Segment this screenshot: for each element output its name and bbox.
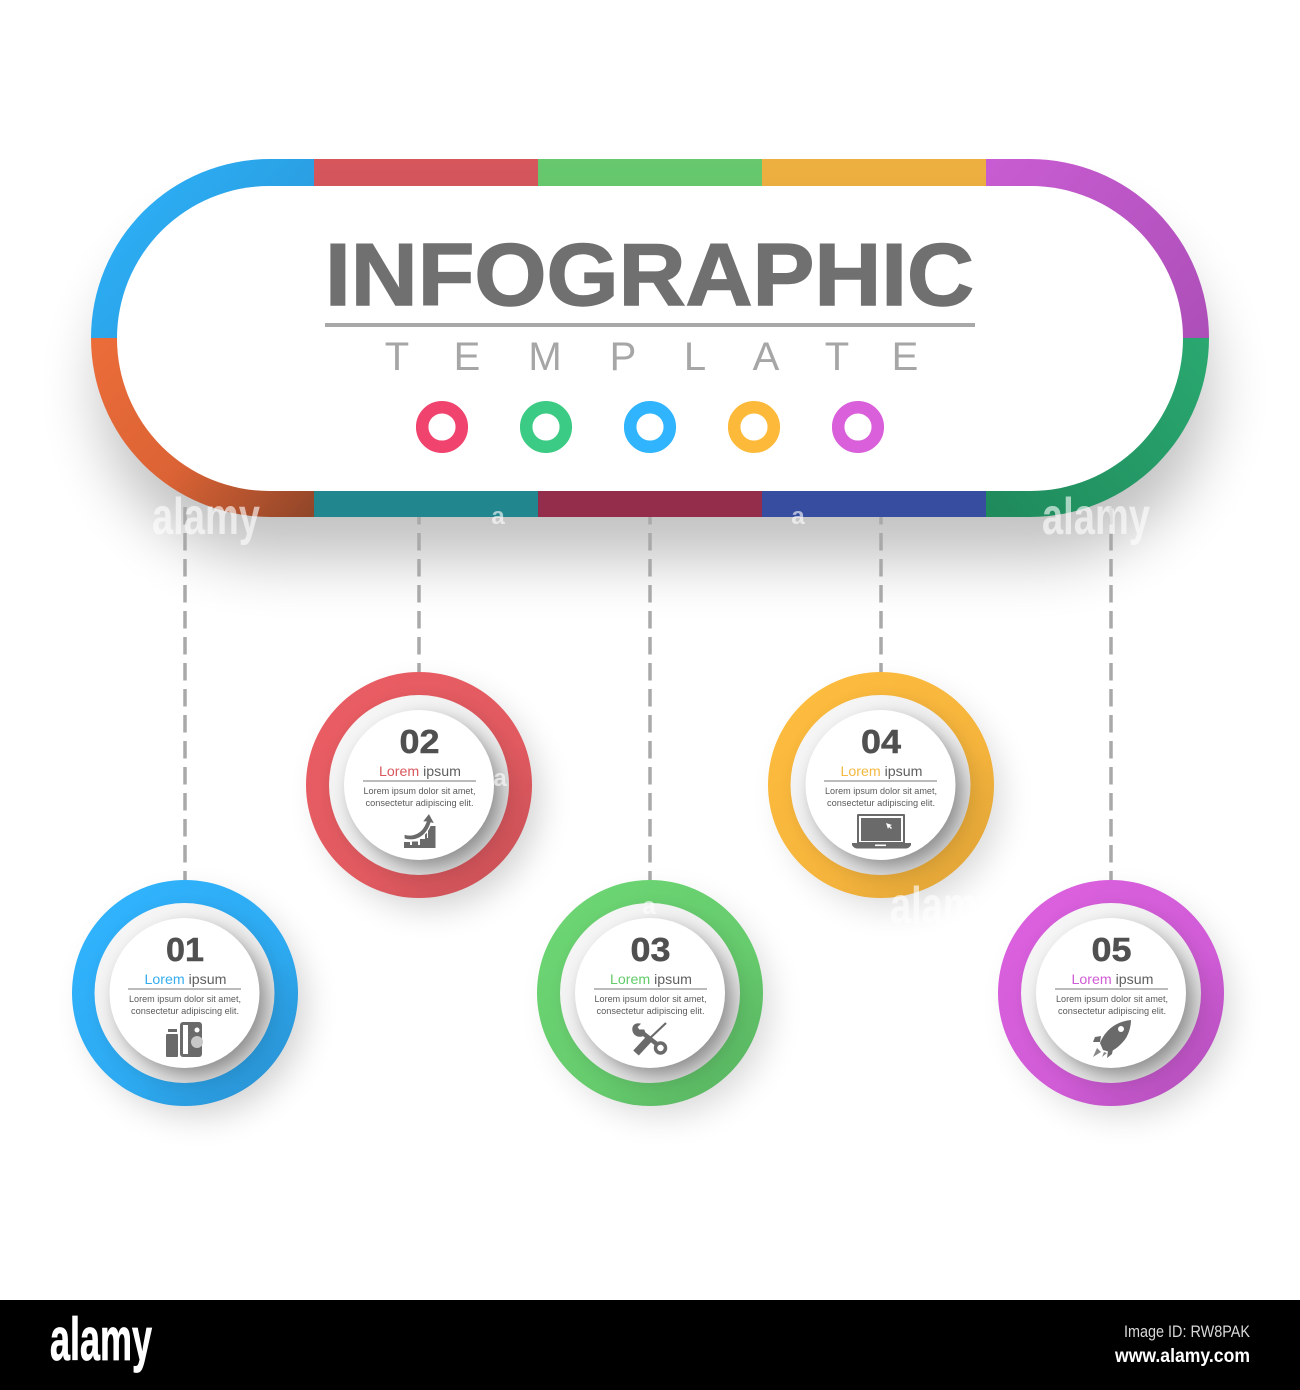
pill white interior — [117, 186, 1183, 491]
watermarks: a — [493, 765, 507, 792]
description: Lorem ipsum dolor sit amet, — [1056, 994, 1168, 1005]
description: consectetur adipiscing elit. — [827, 798, 935, 809]
heading: Lorem ipsum — [379, 763, 461, 779]
watermarks — [152, 488, 1150, 935]
heading: Lorem ipsum — [1072, 971, 1154, 987]
heading: Lorem ipsum — [144, 971, 226, 987]
icon: cards — [166, 1022, 203, 1057]
watermarks: alamy — [152, 488, 260, 546]
subtitle: TEMPLATE — [385, 335, 918, 379]
footer bar — [0, 1300, 1300, 1390]
website: www.alamy.com — [1114, 1346, 1250, 1367]
number 01: 01 — [166, 931, 204, 968]
description: consectetur adipiscing elit. — [131, 1006, 239, 1017]
description: consectetur adipiscing elit. — [366, 798, 474, 809]
description: Lorem ipsum dolor sit amet, — [825, 786, 937, 797]
heading: Lorem ipsum — [840, 763, 922, 779]
watermarks: a — [491, 503, 505, 530]
description: Lorem ipsum dolor sit amet, — [594, 994, 706, 1005]
description: Lorem ipsum dolor sit amet, — [364, 786, 476, 797]
watermarks: a — [642, 893, 656, 920]
watermarks: alamy — [890, 877, 998, 935]
number 03: 03 — [630, 931, 670, 968]
colour dots row — [422, 407, 878, 447]
icon: rising chart — [404, 813, 436, 848]
panel: step 03 — [537, 880, 770, 1115]
number 04: 04 — [861, 723, 902, 760]
heading: Lorem ipsum — [610, 971, 692, 987]
dashed connector lines — [185, 507, 1111, 880]
watermarks: alamy — [1042, 488, 1150, 546]
icon: laptop — [852, 814, 911, 848]
number 02: 02 — [400, 723, 440, 760]
panel shadow — [100, 215, 1210, 560]
panel: step 04 — [768, 672, 1001, 907]
description: consectetur adipiscing elit. — [1058, 1006, 1166, 1017]
panel: step 05 — [998, 880, 1231, 1115]
description: consectetur adipiscing elit. — [596, 1006, 704, 1017]
footer logo: alamy — [50, 1306, 152, 1373]
image id: Image ID: RW8PAK — [1124, 1322, 1251, 1341]
icon: rocket — [1093, 1020, 1131, 1058]
watermarks: a — [791, 503, 805, 530]
panel: main pill header — [91, 159, 1209, 517]
panel: step 01 — [72, 880, 305, 1115]
title: INFOGRAPHIC — [325, 225, 974, 324]
multicolour pill border — [91, 159, 1209, 517]
number 05: 05 — [1092, 931, 1132, 968]
icon: wrench and screwdriver — [633, 1023, 666, 1053]
panel: step 02 — [306, 672, 539, 907]
description: Lorem ipsum dolor sit amet, — [129, 994, 241, 1005]
title underline — [325, 323, 975, 327]
